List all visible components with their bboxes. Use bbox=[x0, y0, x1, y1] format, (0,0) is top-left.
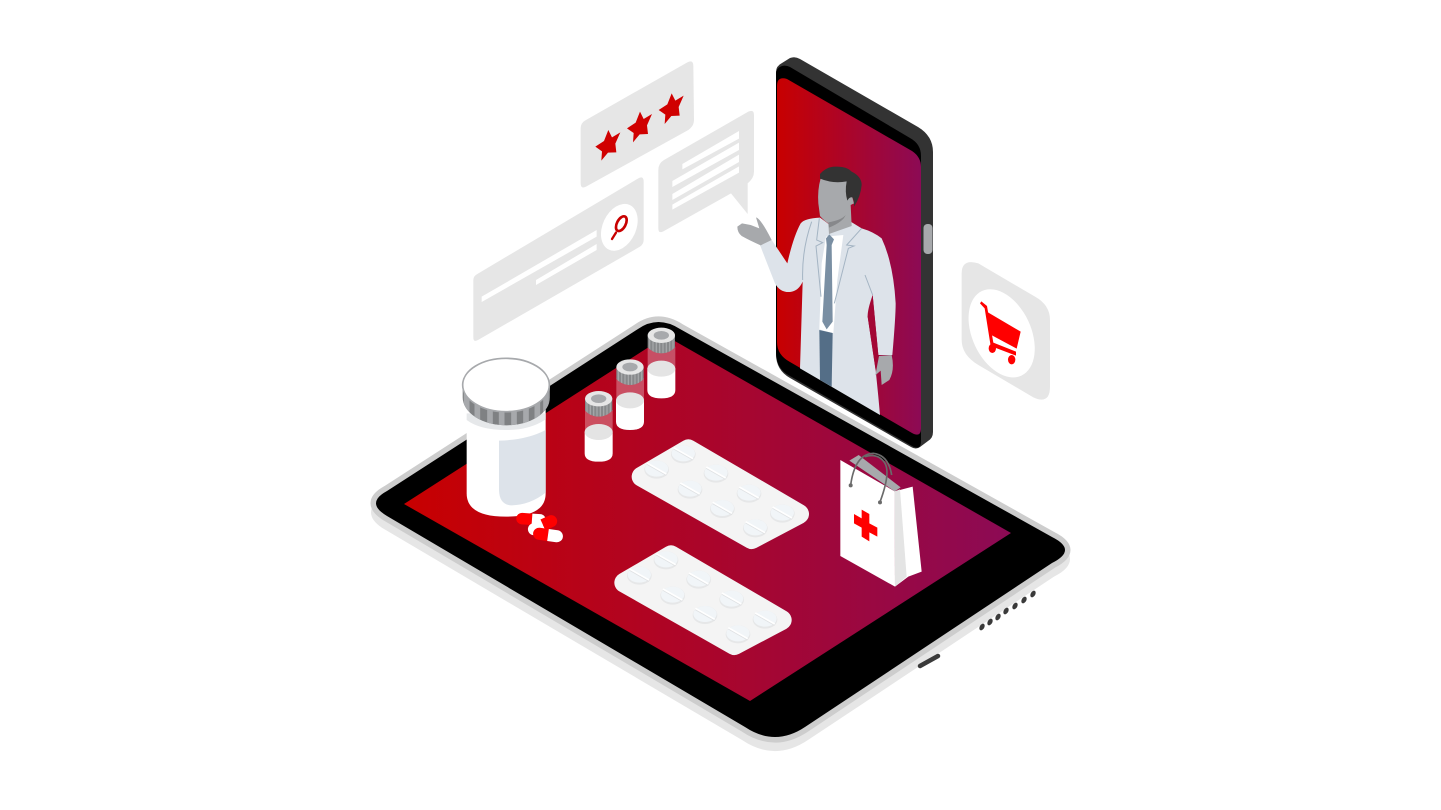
star 3 bbox=[659, 93, 684, 124]
tablet rim bbox=[376, 322, 1065, 737]
rating card bbox=[581, 61, 694, 187]
doctor hair bbox=[820, 167, 862, 207]
red cross bbox=[854, 510, 877, 541]
pill bottle bbox=[463, 358, 550, 517]
cart card bbox=[962, 262, 1050, 400]
pack 1 tablets bbox=[644, 445, 795, 537]
capsule middle bbox=[526, 513, 559, 537]
search text lines bbox=[482, 230, 597, 302]
bottle cap top bbox=[463, 358, 549, 412]
capsule bottom bbox=[532, 527, 564, 543]
shopping bag bbox=[840, 453, 922, 587]
phone screen bbox=[777, 78, 921, 435]
speaker dots bbox=[978, 590, 1037, 631]
coat lapels bbox=[803, 218, 873, 303]
tablet black bezel bbox=[376, 322, 1065, 737]
doctor coat bbox=[760, 218, 896, 415]
trousers bbox=[819, 330, 833, 387]
cap ridges bbox=[467, 387, 546, 427]
cart icon bbox=[980, 301, 1021, 364]
handle rivets bbox=[849, 483, 882, 504]
blister pack 1 bbox=[642, 445, 799, 539]
cart panel bbox=[955, 262, 1050, 400]
tablet base edge bbox=[376, 331, 1065, 746]
doctor bbox=[737, 167, 896, 415]
pack 2 foil bbox=[624, 555, 782, 645]
phone side button bbox=[924, 224, 932, 254]
doctor right hand bbox=[875, 355, 893, 385]
cart button bbox=[955, 279, 1048, 388]
pack 1 foil bbox=[642, 449, 799, 539]
blister pack 2 bbox=[624, 551, 782, 645]
pack 2 tablets bbox=[627, 551, 777, 643]
bag side fold bbox=[895, 489, 907, 587]
capsule top left bbox=[516, 512, 546, 526]
phone body bbox=[776, 57, 933, 448]
tie bbox=[822, 234, 834, 329]
charging port bbox=[920, 656, 938, 666]
doctor left hand bbox=[737, 217, 772, 245]
doctor head bbox=[818, 177, 854, 234]
bubble text lines bbox=[672, 131, 739, 210]
capsules bbox=[516, 512, 564, 543]
tablet bbox=[376, 322, 1065, 746]
star 1 bbox=[595, 130, 620, 161]
illustration: online pharmacy on tablet and phone bbox=[370, 57, 1070, 751]
star 2 bbox=[627, 112, 652, 142]
vials bbox=[585, 328, 675, 462]
bag front bbox=[840, 460, 895, 587]
bottle neck shadow bbox=[467, 413, 546, 430]
tablet screen bbox=[404, 336, 1011, 701]
bottle cap band bbox=[463, 385, 550, 425]
chat bubble bbox=[658, 111, 754, 232]
search panel bbox=[473, 177, 645, 341]
vial 3 bbox=[647, 328, 675, 398]
bottle body bbox=[467, 407, 546, 517]
magnifier icon bbox=[612, 215, 629, 239]
bubble shape bbox=[658, 111, 754, 232]
chin shadow bbox=[828, 215, 846, 228]
bag inside bbox=[849, 455, 901, 491]
phone black face bbox=[776, 66, 921, 448]
bottle label bbox=[499, 430, 546, 505]
vial 2 bbox=[616, 359, 644, 430]
search card bbox=[473, 177, 644, 341]
search button bbox=[594, 198, 645, 257]
bag side bbox=[895, 487, 922, 587]
bag back handle bbox=[851, 453, 892, 485]
shirt bbox=[819, 235, 843, 333]
vial 1 bbox=[585, 391, 613, 462]
bag front handle bbox=[865, 456, 887, 502]
coat gap between arm and body bbox=[868, 295, 878, 371]
rating panel bbox=[581, 61, 694, 187]
phone bbox=[737, 57, 933, 448]
